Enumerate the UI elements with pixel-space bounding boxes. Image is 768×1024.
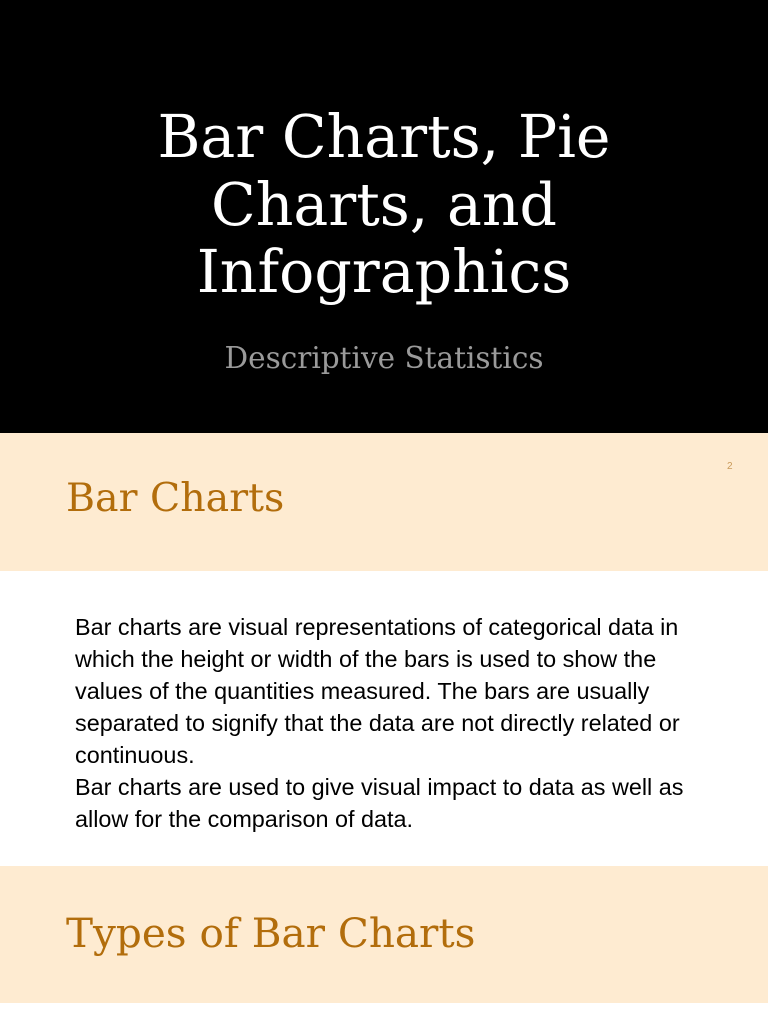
- panel: types of bar charts header: [0, 866, 768, 1003]
- subtitle: Descriptive Statistics: [224, 341, 544, 375]
- text block: definition: Bar charts are visual representations of categorical data in which the height or width of the bars is used to show the values of the quantities measured. The bars are usually separated to signify that the data are not directly related or continuous.: [75, 614, 680, 768]
- text block: definition: Bar charts are used to give visual impact to data as well as allow for the comparison of data.: [75, 774, 683, 832]
- title: Bar Charts, Pie: [157, 103, 611, 171]
- page number: 2: [727, 461, 733, 472]
- title: Infographics: [197, 238, 571, 306]
- title: [157, 103, 611, 306]
- heading: Bar Charts: Bar Charts: [66, 475, 284, 521]
- title: Charts, and: [211, 170, 557, 238]
- panel: title slide: [0, 0, 768, 433]
- panel: bar charts header: [0, 433, 768, 571]
- heading: Types of Bar Charts: Types of Bar Charts: [66, 909, 475, 957]
